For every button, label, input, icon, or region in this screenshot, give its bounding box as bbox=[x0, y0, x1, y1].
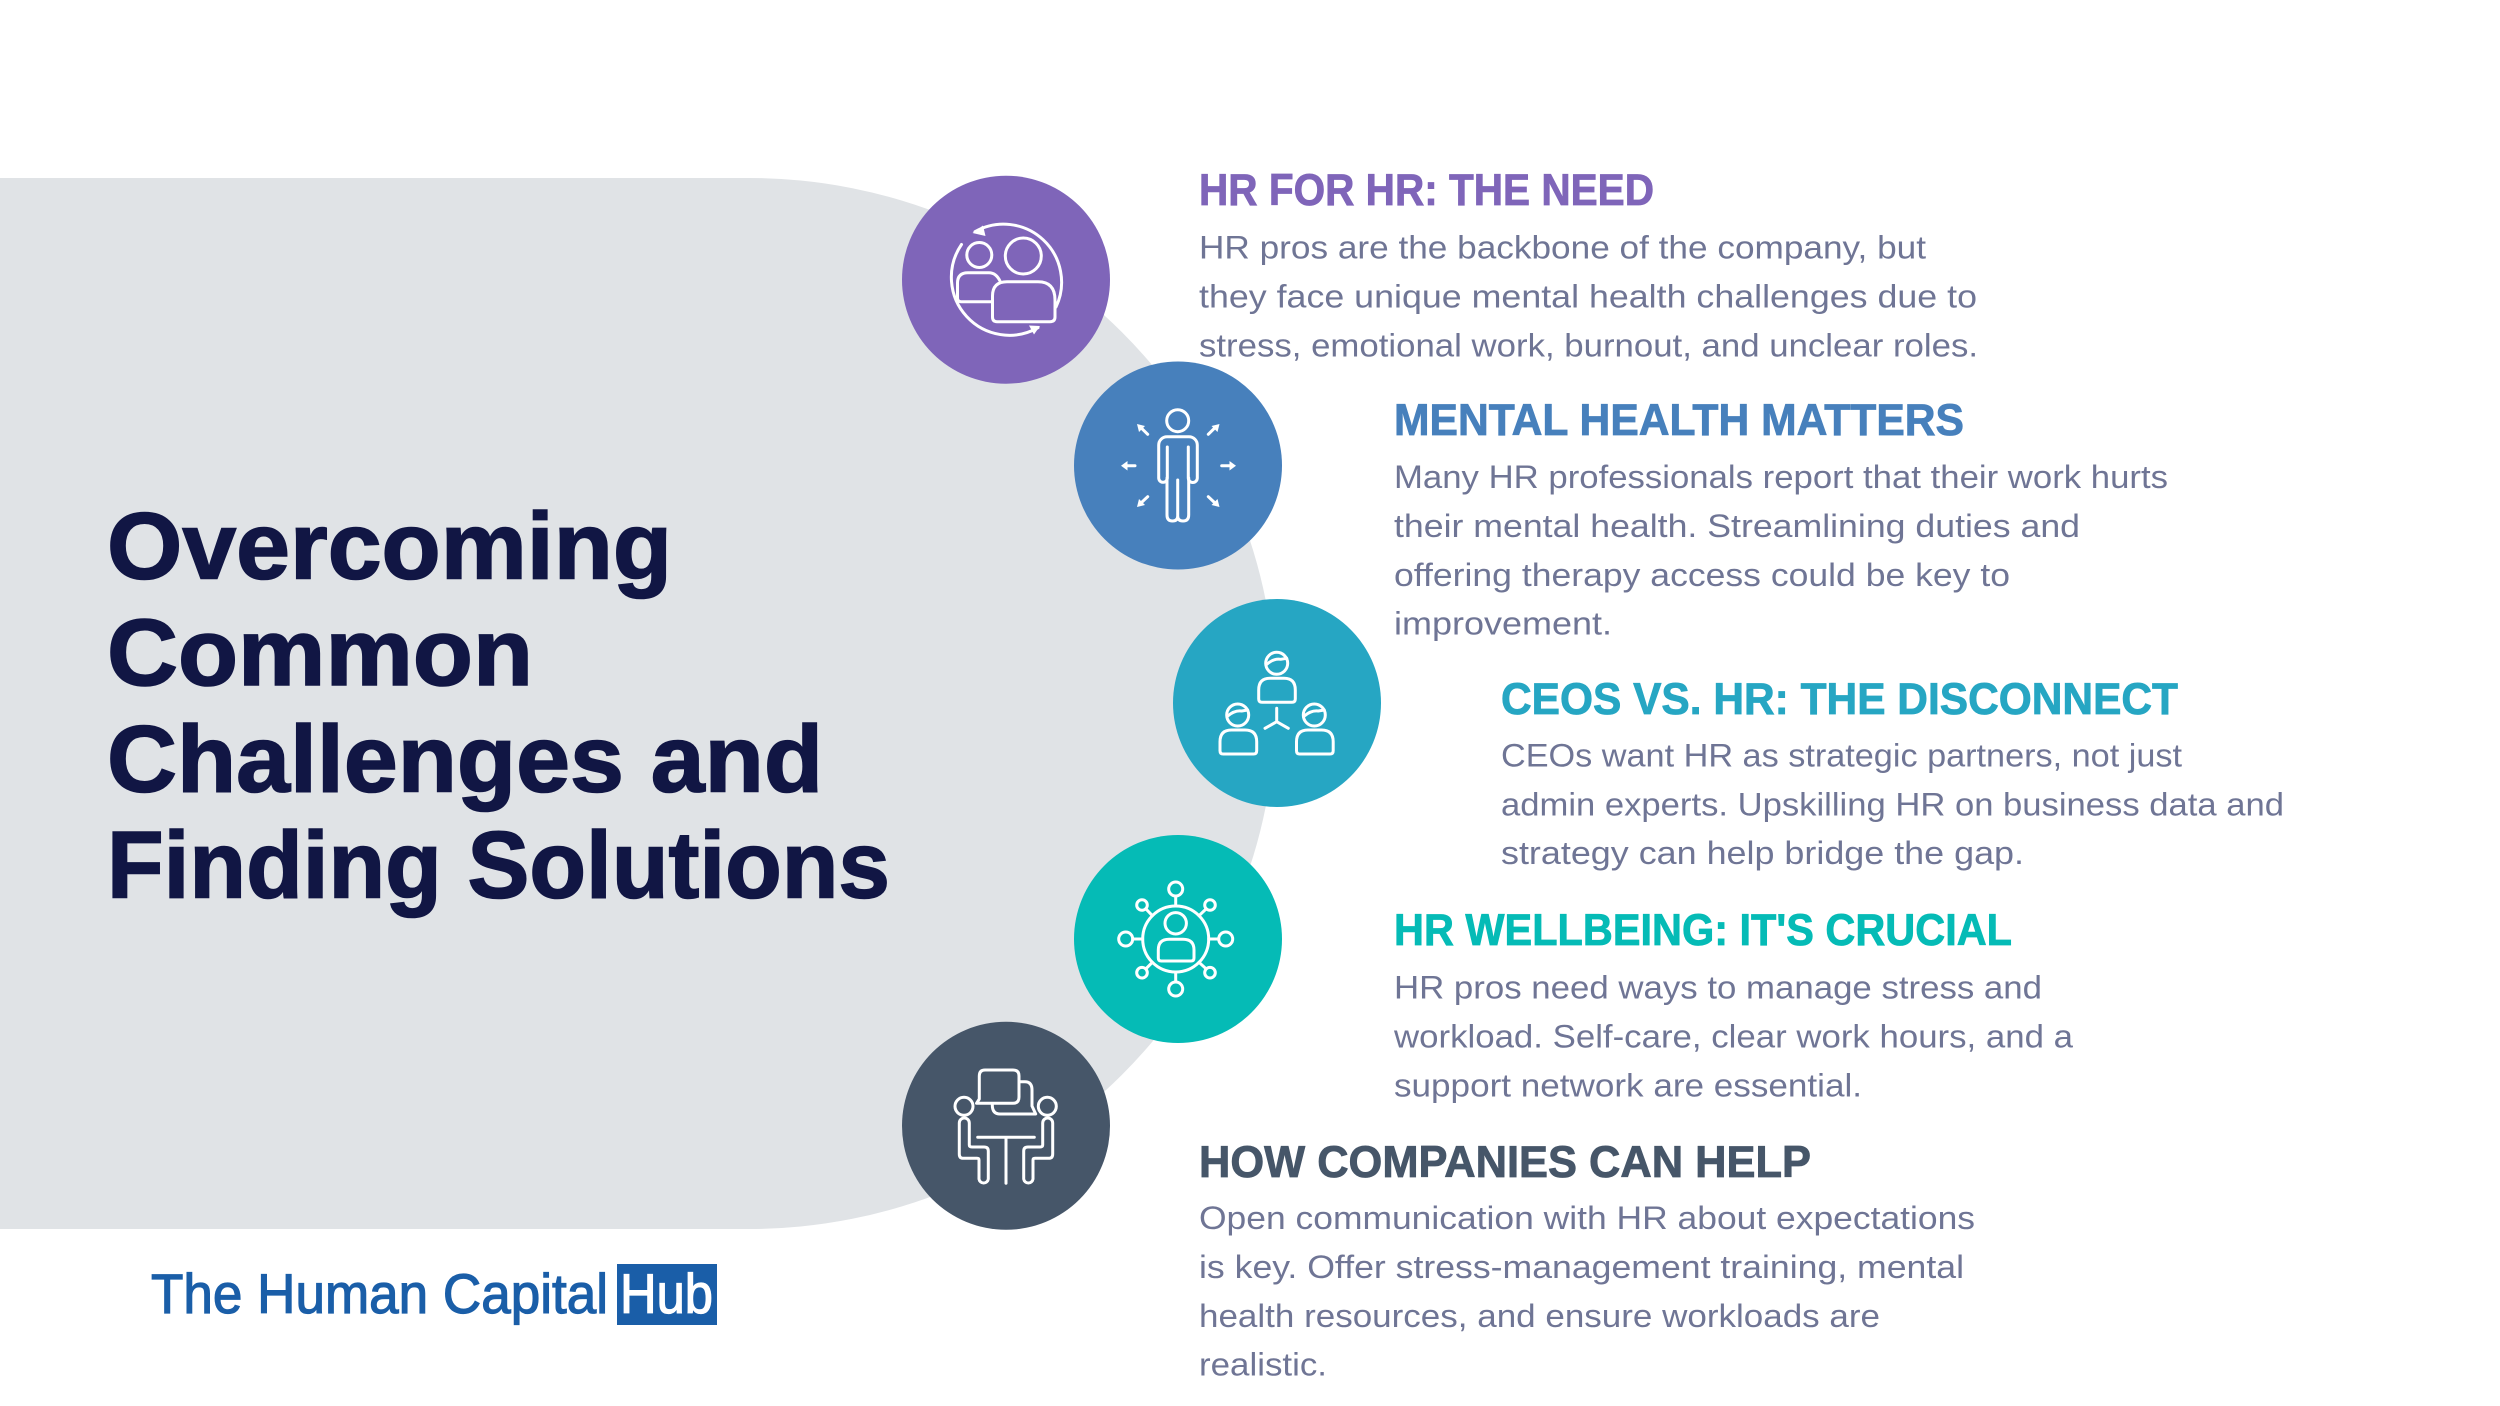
heading and text: HR wellbeing: support network are essential. bbox=[1394, 1068, 1862, 1104]
logo: The Human Capital Hub: Hub bbox=[620, 1262, 713, 1325]
heading and text: HR wellbeing bbox=[1393, 906, 2074, 1104]
heading and text: how companies can help: health resources, and ensure workloads are bbox=[1199, 1298, 1880, 1334]
heading and text: mental health matters: their mental health. Streamlining duties and bbox=[1394, 508, 2080, 544]
heading and text: how companies can help: Open communication with HR about expectations bbox=[1199, 1200, 1975, 1236]
title: Finding Solutions bbox=[107, 812, 890, 918]
heading and text: CEOs vs HR bbox=[1501, 675, 2284, 871]
icon: teal-blue circle with three people bbox=[1173, 599, 1381, 807]
heading and text: CEOs vs HR: CEOs want HR as strategic partners, not just bbox=[1501, 738, 2182, 774]
heading and text: how companies can help bbox=[1199, 1138, 1975, 1382]
heading and text: HR wellbeing: workload. Self-care, clear work hours, and a bbox=[1393, 1018, 2074, 1054]
title bbox=[107, 494, 890, 918]
icon: purple circle with two people and cycle arrows bbox=[902, 176, 1110, 384]
heading and text: mental health matters: Many HR professionals report that their work hurts bbox=[1394, 459, 2168, 495]
heading and text: CEOs vs HR: strategy can help bridge the gap. bbox=[1501, 835, 2024, 871]
heading and text: CEOs vs HR: CEOS VS. HR: THE DISCONNECT bbox=[1501, 675, 2178, 724]
heading and text: CEOs vs HR: admin experts. Upskilling HR on business data and bbox=[1501, 786, 2284, 822]
heading and text: how companies can help: realistic. bbox=[1199, 1346, 1327, 1382]
icon: slate circle with two people meeting at a table bbox=[902, 1022, 1110, 1230]
heading and text: mental health matters: improvement. bbox=[1394, 606, 1612, 642]
heading and text: HR wellbeing: HR WELLBEING: IT'S CRUCIAL bbox=[1394, 906, 2012, 955]
logo: The Human Capital Hub: The Human Capital bbox=[151, 1262, 608, 1325]
icon: green-teal circle with networked person bbox=[1074, 835, 1282, 1043]
heading and text: HR wellbeing: HR pros need ways to manage stress and bbox=[1394, 970, 2042, 1006]
title: Challenges and bbox=[107, 706, 823, 812]
heading and text: how companies can help: HOW COMPANIES CAN HELP bbox=[1199, 1138, 1811, 1187]
heading and text: HR for HR: stress, emotional work, burnout, and unclear roles. bbox=[1199, 328, 1978, 364]
heading and text: how companies can help: is key. Offer stress-management training, mental bbox=[1199, 1249, 1964, 1285]
icon: blue circle with person and radiating arrows bbox=[1074, 362, 1282, 570]
heading and text: HR for HR bbox=[1199, 166, 1978, 364]
panel: grey rounded background bbox=[0, 178, 1276, 1229]
heading and text: mental health matters: offering therapy access could be key to bbox=[1394, 557, 2010, 593]
heading and text: HR for HR: HR pros are the backbone of the company, but bbox=[1199, 230, 1926, 266]
heading and text: mental health matters bbox=[1394, 396, 2168, 642]
title: Common bbox=[107, 600, 533, 706]
heading and text: HR for HR: they face unique mental health challenges due to bbox=[1199, 278, 1977, 314]
title: Overcoming bbox=[107, 494, 672, 600]
heading and text: mental health matters: MENTAL HEALTH MATTERS bbox=[1394, 396, 1964, 445]
heading and text: HR for HR: HR FOR HR: THE NEED bbox=[1199, 166, 1654, 215]
